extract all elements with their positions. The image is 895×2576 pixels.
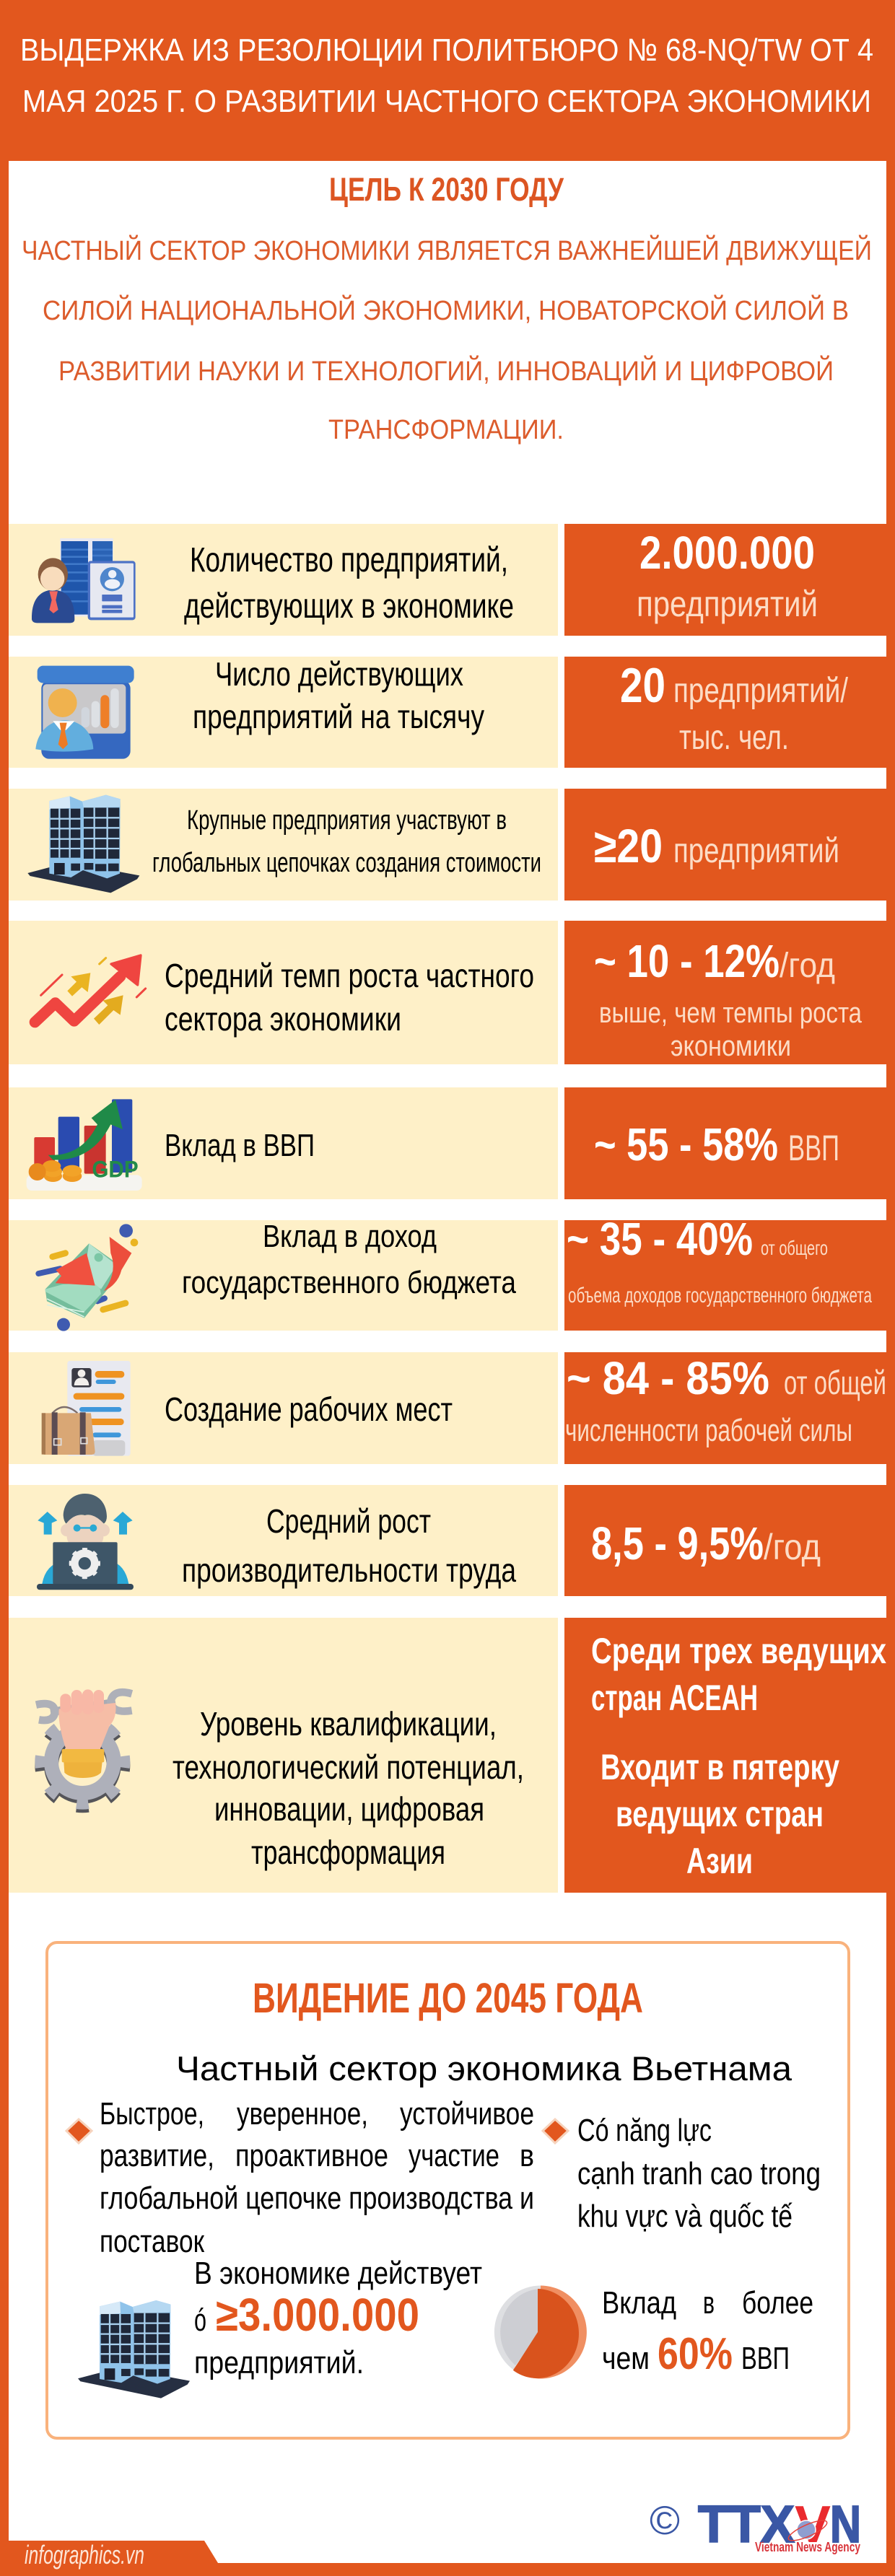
bullet: right diamond — [543, 2119, 568, 2143]
text block: rapid development: поставок — [100, 2224, 205, 2259]
text block: goal description: СИЛОЙ НАЦИОНАЛЬНОЙ ЭКОНОМИКИ, НОВАТОРСКОЙ СИЛОЙ В — [43, 294, 849, 326]
value: ~ 10 - 12% — [594, 935, 780, 987]
stat: 3 million enterprises: ó — [194, 2303, 206, 2338]
panel: row 9 qualifications and innovation — [9, 1618, 886, 1893]
text block: rapid development: Быстрое, — [100, 2096, 204, 2132]
label: производительности труда — [182, 1551, 516, 1589]
value: ~ 55 - 58% — [594, 1118, 778, 1170]
bullet: left diamond — [66, 2119, 92, 2143]
value — [594, 819, 839, 872]
value: предприятий — [673, 832, 839, 870]
value — [620, 658, 849, 757]
text block: goal description — [22, 234, 872, 445]
text block: competitiveness: cạnh tranh cao trong — [577, 2156, 821, 2191]
icon: GDP bars: GDP — [92, 1157, 139, 1183]
panel: row 1 enterprises in economy — [9, 524, 886, 636]
label — [184, 541, 514, 626]
icon: GDP bars — [27, 1099, 142, 1191]
text block: rapid development: устойчивое — [400, 2096, 534, 2132]
label: Число действующих — [215, 655, 463, 693]
label: государственного бюджета — [182, 1265, 516, 1300]
label — [182, 1502, 516, 1589]
footer tab — [0, 2541, 895, 2576]
text block: competitiveness — [577, 2113, 821, 2234]
stat: 60 percent of GDP — [602, 2285, 813, 2379]
value: ≥20 — [594, 819, 663, 872]
label: сектора экономики — [165, 1000, 401, 1038]
text block: rapid development: в — [520, 2138, 534, 2173]
stat: 60 percent of GDP: в — [703, 2285, 715, 2321]
panel: vision to 2045 — [47, 1942, 849, 2438]
stat: 60 percent of GDP: 60% — [658, 2329, 733, 2379]
label: Вклад в ВВП — [165, 1128, 315, 1163]
copyright symbol: © — [650, 2497, 680, 2543]
icon: growth arrow — [35, 955, 146, 1025]
label: Средний рост — [266, 1502, 431, 1540]
label — [165, 957, 534, 1038]
label: Уровень квалификации, — [200, 1705, 497, 1743]
stat: 3 million enterprises: В экономике действует — [194, 2256, 482, 2291]
label: Крупные предприятия участвуют в — [187, 805, 507, 836]
value: предприятий/ — [673, 672, 849, 710]
text block: rapid development: глобальной цепочке производства и — [100, 2181, 534, 2216]
value: ВВП — [788, 1128, 839, 1168]
title — [20, 32, 873, 119]
icon: presenter with chart — [35, 666, 134, 759]
logo: TTXVN — [698, 2496, 861, 2554]
label: глобальных цепочках создания стоимости — [152, 848, 541, 878]
icon: office building — [27, 795, 139, 893]
label: технологический потенциал, — [173, 1748, 524, 1786]
icon: money stack with arrows — [38, 1224, 138, 1331]
stat: 60 percent of GDP: более — [742, 2285, 813, 2321]
footer site name: infographics.vn — [25, 2540, 144, 2570]
stat: 3 million enterprises: предприятий. — [194, 2345, 364, 2380]
value — [594, 935, 863, 1062]
panel: row 6 contribution to state budget — [9, 1213, 886, 1331]
panel: row 3 large enterprises in global chains — [9, 789, 886, 901]
label: Количество предприятий, — [190, 541, 508, 579]
value: 8,5 - 9,5% — [591, 1517, 764, 1569]
icon: office building — [78, 2300, 190, 2398]
value: Азии — [686, 1841, 753, 1881]
panel: row 7 job creation — [9, 1352, 886, 1464]
stat: 3 million enterprises — [194, 2256, 482, 2380]
text block: rapid development: уверенное, — [237, 2096, 368, 2132]
value — [591, 1631, 886, 1881]
label: Вклад в доход — [263, 1219, 437, 1254]
text block: goal description: ТРАНСФОРМАЦИИ. — [328, 415, 564, 445]
label: трансформация — [251, 1834, 445, 1871]
label: Создание рабочих мест — [165, 1390, 453, 1428]
value — [565, 1352, 886, 1448]
value: стран АСЕАН — [591, 1678, 758, 1718]
value: 2.000.000 — [639, 527, 815, 579]
label: предприятий на тысячу — [193, 698, 484, 735]
label: Средний темп роста частного — [165, 957, 534, 994]
icon: businessman with profile card — [32, 538, 136, 623]
logo: TTXVN: Vietnam News Agency — [755, 2540, 860, 2554]
value: ~ 84 - 85% — [567, 1352, 769, 1404]
value: предприятий — [637, 584, 818, 624]
value: от общего — [761, 1237, 828, 1259]
value: /год — [764, 1527, 821, 1567]
text block: rapid development — [100, 2096, 534, 2259]
heading: vision to 2045: ВИДЕНИЕ ДО 2045 ГОДА — [253, 1975, 643, 2022]
subheading: Частный сектор экономика Вьетнама — [176, 2049, 793, 2087]
label: действующих в экономике — [184, 587, 514, 626]
value: тыс. чел. — [679, 719, 789, 757]
value: 20 — [620, 658, 665, 713]
logo: TTXVN: V — [795, 2496, 831, 2554]
stat: 60 percent of GDP: Вклад — [602, 2285, 676, 2321]
label — [193, 655, 484, 735]
text block: rapid development: развитие, — [100, 2138, 214, 2173]
icon: resume and briefcase — [42, 1361, 131, 1456]
stat: 3 million enterprises: ≥3.000.000 — [216, 2289, 419, 2341]
icon: worker at laptop — [37, 1494, 134, 1590]
value: ведущих стран — [616, 1794, 824, 1834]
heading: goal to 2030: ЦЕЛЬ К 2030 ГОДУ — [329, 171, 564, 208]
value — [567, 1213, 872, 1307]
chart: pie 60 percent — [494, 2286, 587, 2378]
panel: row 4 growth rate — [9, 921, 886, 1064]
value: /год — [780, 947, 835, 985]
panel: row 8 labour productivity — [9, 1485, 886, 1596]
icon: hand with wrench and gear — [36, 1689, 132, 1808]
text block: rapid development: проактивное — [235, 2138, 388, 2173]
label: инновации, цифровая — [214, 1790, 484, 1828]
text block: competitiveness: khu vực và quốc tế — [577, 2199, 793, 2234]
stat: 60 percent of GDP: чем — [602, 2341, 650, 2376]
logo: TTXVN: N — [830, 2496, 861, 2554]
stat: 60 percent of GDP: ВВП — [741, 2341, 790, 2376]
panel: row 5 contribution to GDP — [9, 1087, 886, 1199]
text block: rapid development: участие — [409, 2138, 499, 2173]
text block: competitiveness: Có năng lực — [577, 2113, 712, 2148]
text block: goal description: РАЗВИТИИ НАУКИ И ТЕХНОЛОГИЙ, ИННОВАЦИЙ И ЦИФРОВОЙ — [58, 354, 834, 387]
value: ~ 35 - 40% — [567, 1213, 753, 1265]
label — [173, 1705, 524, 1871]
panel: row 2 enterprises per thousand — [9, 655, 886, 768]
label — [182, 1219, 516, 1300]
logo: TTXVN: TTX — [698, 2496, 795, 2554]
value: экономики — [671, 1030, 791, 1062]
label — [152, 805, 541, 878]
value — [637, 527, 818, 624]
